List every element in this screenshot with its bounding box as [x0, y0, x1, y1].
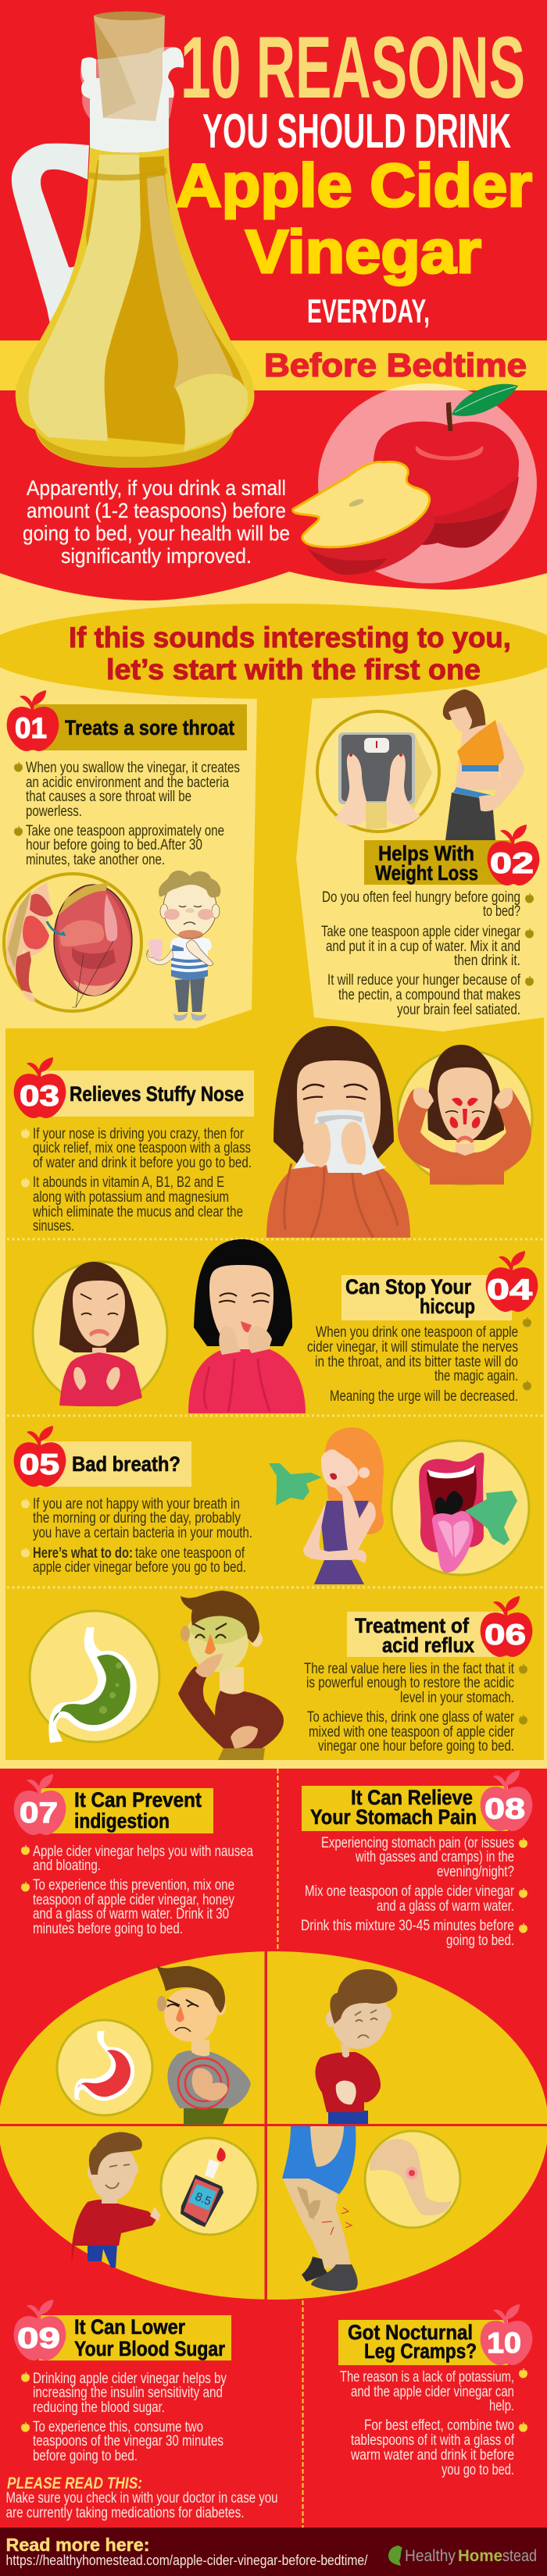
heading 05: 05 — [20, 1448, 59, 1480]
heading 07: 07 — [20, 1797, 58, 1829]
dotted divider — [7, 1587, 544, 1588]
text 05: you have a certain bacteria in your mouth. — [33, 1525, 252, 1541]
heading 10: Got Nocturnal — [348, 2321, 473, 2344]
icon: glucose meter circle — [161, 2138, 258, 2235]
footer — [0, 2528, 547, 2576]
text 02: your brain feel satiated. — [397, 1002, 520, 1018]
heading 06 — [347, 1596, 532, 1657]
logo: Healthy — [405, 2547, 456, 2565]
dotted divider — [7, 1415, 544, 1416]
panel: 02 weight loss — [317, 689, 539, 1018]
logo — [388, 2546, 537, 2566]
read more link — [6, 2535, 367, 2568]
text 10: For best effect, combine two — [364, 2417, 514, 2434]
icon: sinus circle — [398, 1045, 532, 1185]
text 07: teaspoon of apple cider vinegar, honey — [33, 1892, 234, 1908]
text 10: help. — [489, 2398, 514, 2414]
icon: glucose meter circle: 8.5 — [193, 2190, 213, 2208]
text 05 — [21, 1496, 252, 1576]
title: Vinegar — [245, 217, 481, 286]
red lower section background — [0, 1769, 547, 2528]
pale yellow body background — [0, 562, 547, 1769]
text 01: that causes a sore throat will be — [26, 789, 191, 805]
text 10 — [340, 2368, 527, 2478]
heading 09: It Can Lower — [74, 2315, 185, 2339]
text 03: If your nose is driving you crazy, then for — [33, 1126, 245, 1142]
text 05: take one teaspoon of — [135, 1545, 245, 1562]
text 05: the morning or during the day, probably — [33, 1510, 241, 1527]
intro text: Apparently, if you drink a small — [27, 476, 286, 500]
callout: please read this: PLEASE READ THIS: — [7, 2474, 142, 2492]
icon: woman covering mouth — [188, 1239, 306, 1413]
heading 06: 06 — [484, 1619, 526, 1651]
text 08: going to bed. — [446, 1933, 514, 1949]
panel: 07 indigestion — [14, 1774, 253, 1937]
text 01: minutes, take another one. — [26, 852, 165, 868]
text 03: along with potassium and magnesium — [33, 1189, 229, 1206]
heading 10: Leg Cramps? — [364, 2339, 477, 2363]
heading 09 — [14, 2300, 231, 2360]
heading 07 — [14, 1774, 213, 1835]
title: Before Bedtime — [264, 347, 527, 383]
heading 02: Weight Loss — [375, 861, 478, 885]
heading 09: Your Blood Sugar — [74, 2337, 225, 2360]
dashed divider upper — [277, 1769, 278, 1951]
text 07: To experience this prevention, mix one — [33, 1877, 234, 1894]
text 01: powerless. — [26, 803, 82, 820]
panel: 03 stuffy nose — [14, 1026, 532, 1238]
heading 07: It Can Prevent — [74, 1788, 202, 1812]
text 07: minutes before going to bed. — [33, 1921, 183, 1937]
heading 04: hiccup — [420, 1295, 475, 1318]
icon: woman blowing nose — [266, 1026, 410, 1238]
heading 01 — [7, 690, 247, 751]
section intro heading — [69, 622, 511, 686]
heading 04 — [341, 1251, 538, 1320]
heading 09: 09 — [17, 2322, 60, 2354]
text 05: If you are not happy with your breath in — [33, 1496, 240, 1512]
text 01: When you swallow the vinegar, it creates — [26, 760, 240, 776]
text 07 — [21, 1844, 253, 1937]
icon: man with glucose meter — [72, 2132, 160, 2268]
icon: woman with bad breath — [269, 1427, 384, 1584]
panel: 04 hiccup — [33, 1239, 538, 1413]
text 02: to bed? — [483, 903, 520, 920]
text 03: It abounds in vitamin A, B1, B2 and E — [33, 1174, 224, 1191]
icon: leg cramp circle — [365, 2131, 460, 2228]
text 06: level in your stomach. — [400, 1690, 514, 1706]
title: Apple Cider — [176, 151, 532, 219]
text 09: before going to bed. — [33, 2448, 138, 2464]
text 09 — [21, 2371, 227, 2464]
icon: red stomach circle — [57, 2020, 152, 2115]
icon: woman on scale — [443, 689, 524, 840]
text 08 — [301, 1835, 527, 1949]
intro text: significantly improved. — [61, 544, 252, 568]
intro text — [23, 476, 290, 568]
text 10: you go to bed. — [442, 2462, 514, 2478]
icon: vinegar bottle — [12, 12, 255, 468]
text 01: an acidic environment and the bacteria — [26, 775, 229, 791]
text 01 — [14, 760, 240, 868]
text 09: increasing the insulin sensitivity and — [33, 2385, 223, 2401]
section intro heading: let’s start with the first one — [106, 654, 481, 686]
heading 05 — [14, 1426, 191, 1487]
heading 08: It Can Relieve — [351, 1786, 473, 1809]
heading 08: 08 — [484, 1793, 525, 1825]
icon: boy with sore throat — [147, 871, 220, 1021]
icon: man with indigestion — [156, 1965, 251, 2125]
icon: man with stomach pain — [316, 1969, 397, 2124]
heading 10 — [338, 2304, 532, 2365]
text 07: and bloating. — [33, 1858, 101, 1874]
big yellow circle panel — [0, 1951, 547, 2300]
heading 04: 04 — [487, 1274, 533, 1306]
callout: please read this — [6, 2474, 278, 2521]
heading 05: Bad breath? — [72, 1452, 181, 1476]
text 09: Drinking apple cider vinegar helps by — [33, 2371, 227, 2387]
icon: throat diagram — [4, 874, 141, 1011]
heading 02: Helps With — [378, 842, 474, 865]
text 09: reducing the blood sugar. — [33, 2400, 165, 2416]
heading 03 — [14, 1057, 254, 1118]
text 05: apple cider vinegar before you go to bed. — [33, 1559, 246, 1576]
heading 02: 02 — [490, 847, 534, 879]
text 03 — [21, 1126, 252, 1235]
red header panel — [0, 0, 547, 600]
dark yellow background shape — [0, 604, 547, 1760]
text 09: To experience this, consume two — [33, 2419, 203, 2435]
heading 06: acid reflux — [382, 1634, 474, 1657]
panel: 05 bad breath — [14, 1426, 529, 1584]
panel: 06 acid reflux — [30, 1591, 532, 1760]
heading 08 — [302, 1770, 532, 1831]
text 07: and a glass of warm water. Drink it 30 — [33, 1906, 229, 1922]
text 02 — [321, 889, 534, 1018]
text 06 — [304, 1661, 527, 1755]
dotted divider — [7, 1238, 544, 1240]
heading 03: Relieves Stuffy Nose — [70, 1082, 244, 1106]
read more link: Read more here: — [6, 2535, 150, 2555]
read more link: https://healthyhomestead.com/apple-cider-vinegar-before-bedtime/ — [6, 2553, 367, 2568]
callout: please read this: Make sure you check in with your doctor in case you — [6, 2490, 278, 2507]
text 03: which eliminate the mucus and clear the — [32, 1204, 243, 1220]
heading 06: Treatment of — [355, 1614, 470, 1637]
text 03: quick relief, mix one teaspoon with a glass — [33, 1140, 251, 1156]
icon: apple with slice — [293, 383, 537, 583]
text 04: the magic again. — [434, 1368, 518, 1384]
text 02: then drink it. — [454, 953, 520, 969]
heading 01: 01 — [15, 712, 47, 744]
intro text: going to bed, your health will be — [23, 522, 290, 545]
text 01: Take one teaspoon approximately one — [26, 823, 224, 839]
title: EVERYDAY, — [307, 293, 430, 330]
title — [176, 19, 532, 383]
heading 02 — [364, 825, 539, 885]
text 04 — [307, 1317, 531, 1405]
heading 04: Can Stop Your — [345, 1275, 471, 1299]
dashed divider lower — [302, 2300, 303, 2528]
panel: 09 blood sugar — [6, 2300, 278, 2521]
icon: man with heartburn — [178, 1591, 284, 1760]
heading 10: 10 — [487, 2327, 521, 2359]
logo: stead — [502, 2547, 537, 2565]
text 08: evening/night? — [437, 1864, 514, 1880]
text 03: sinuses. — [33, 1218, 74, 1235]
icon: feet on scale — [317, 711, 439, 832]
panel: 01 sore throat — [4, 690, 247, 1021]
icon: legs with cramp — [282, 2126, 358, 2291]
heading 08: Your Stomach Pain — [310, 1805, 477, 1829]
intro text: amount (1-2 teaspoons) before — [27, 499, 286, 522]
icon: hiccup circle — [33, 1262, 167, 1406]
panel: 10 leg cramps — [338, 2304, 532, 2478]
text 01: hour before going to bed.After 30 — [26, 837, 202, 853]
icon: open mouth circle — [391, 1441, 529, 1575]
yellow banner band — [0, 340, 547, 390]
panel: 08 stomach pain — [301, 1770, 532, 1949]
icon: acid stomach circle — [30, 1611, 159, 1743]
text 05: Here’s what to do: — [33, 1545, 133, 1562]
text 09: teaspoons of the vinegar 30 minutes — [33, 2433, 223, 2450]
section intro heading: If this sounds interesting to you, — [69, 622, 511, 654]
text 07: Apple cider vinegar helps you with nausea — [33, 1844, 253, 1860]
callout: please read this: are currently taking medications for diabetes. — [6, 2505, 244, 2521]
logo: Home — [458, 2547, 502, 2565]
text 10: warm water and drink it before — [350, 2447, 514, 2464]
text 03: of water and drink it before you go to bed. — [33, 1155, 252, 1171]
heading 01: Treats a sore throat — [65, 716, 234, 739]
heading 03: 03 — [20, 1080, 59, 1112]
heading 07: indigestion — [74, 1809, 170, 1833]
